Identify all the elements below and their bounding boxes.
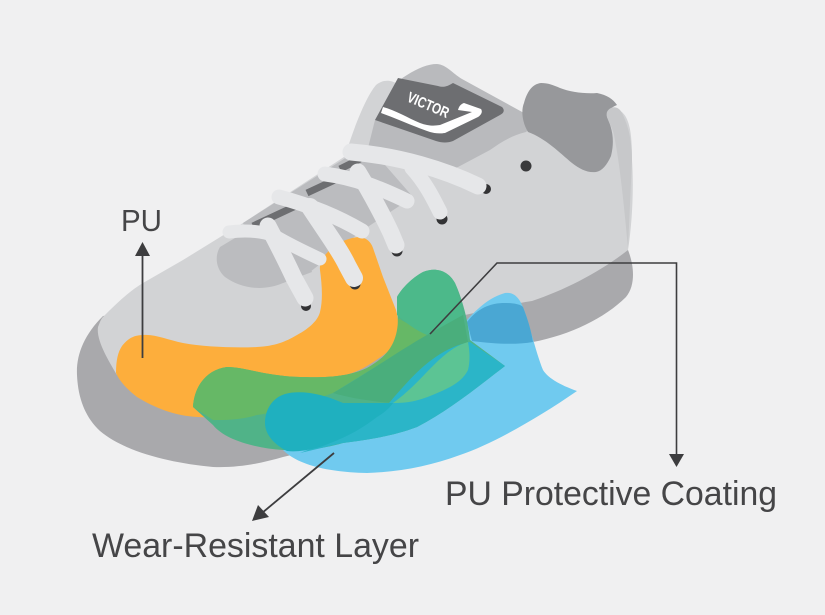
orange PU layer: [116, 237, 398, 420]
heel strip: [607, 107, 632, 248]
lower green area: [193, 270, 505, 450]
lacing panel: [243, 150, 413, 283]
tongue left strip: [347, 81, 397, 150]
logo patch: [375, 78, 504, 142]
laces: [229, 152, 478, 298]
upper green tab: [397, 270, 463, 335]
dark green band: [333, 315, 468, 403]
teal overlap blob: [265, 392, 393, 451]
blue over outsole: [467, 303, 533, 344]
label: PU Protective Coating: PU Protective Coating: [445, 475, 777, 513]
shoe illustration: [77, 64, 633, 473]
tongue: [368, 64, 530, 172]
logo swoosh: [381, 103, 482, 133]
light green overlap: [393, 342, 470, 403]
upper body: [98, 90, 633, 400]
arrow: PU: [135, 242, 150, 358]
green over orange: [193, 318, 427, 420]
arrow: PU protective coating: [430, 263, 684, 467]
eyelets: [301, 184, 491, 311]
outsole: [77, 250, 633, 467]
collar lining: [522, 83, 617, 172]
teal wear layer: [300, 342, 505, 453]
label: PU: PU: [121, 203, 162, 238]
logo wordmark: VICTOR: [404, 89, 452, 122]
arrow: wear-resistant layer: [252, 453, 334, 521]
label: Wear-Resistant Layer: Wear-Resistant Layer: [92, 527, 419, 565]
light blue protective layer: [283, 293, 577, 473]
toe oval: [217, 232, 312, 288]
lace gap stripe: [253, 159, 360, 226]
eye hole: [520, 160, 532, 172]
